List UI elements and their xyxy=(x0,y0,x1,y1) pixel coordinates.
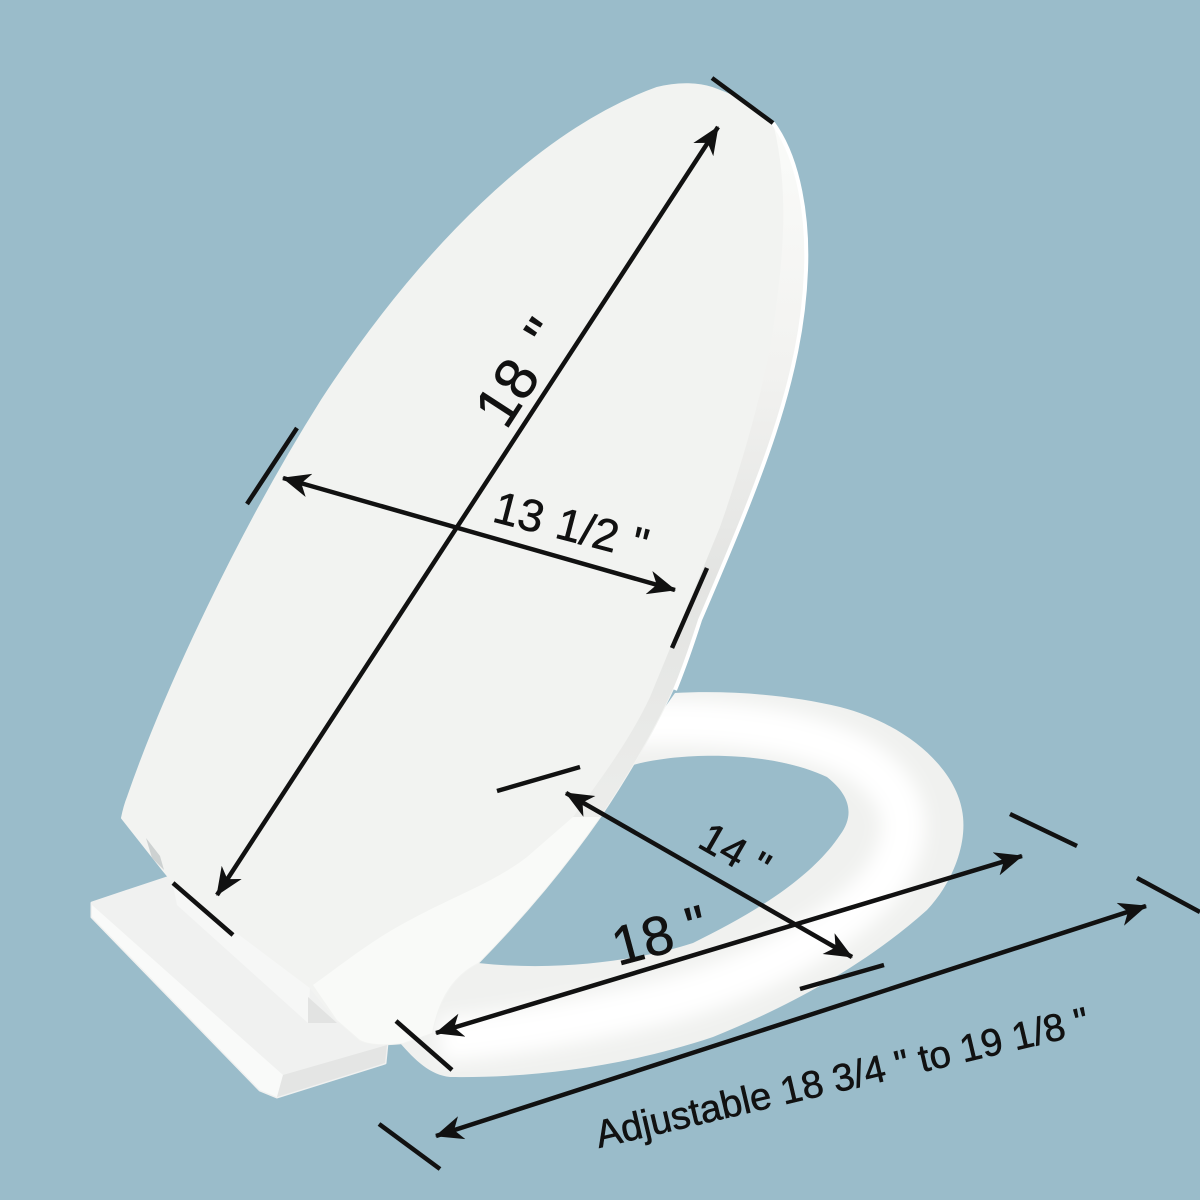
toilet seat ring xyxy=(401,692,964,1078)
dimension: lid length 18 inches xyxy=(173,78,773,935)
base plate: hinge mount xyxy=(92,878,387,1097)
dimension: lid width 13 1/2 inches xyxy=(247,428,707,648)
dimension: seat length 18 inches: 18 " xyxy=(605,893,714,978)
dimension: seat opening 14 inches xyxy=(497,767,884,989)
dimension: adjustable range: Adjustable 18 3/4 " to 19 1/8 " xyxy=(591,999,1093,1157)
dimension: adjustable range xyxy=(379,878,1200,1169)
dimension: seat length 18 inches xyxy=(396,814,1077,1070)
dimension: lid length 18 inches: 18 " xyxy=(462,307,578,438)
dimension: seat opening 14 inches: 14 " xyxy=(692,813,778,890)
lid xyxy=(122,84,806,1044)
dimension: lid width 13 1/2 inches: 13 1/2 " xyxy=(488,481,654,570)
